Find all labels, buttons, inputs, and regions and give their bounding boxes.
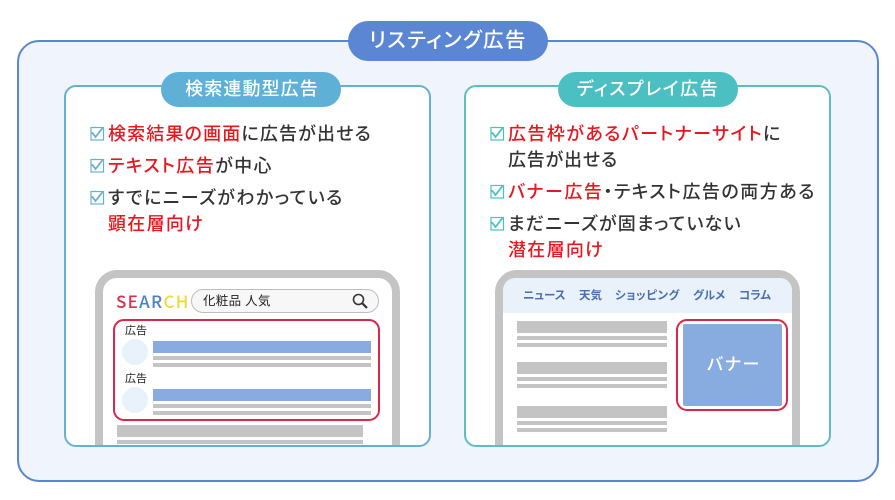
ad results highlight (113, 319, 380, 421)
panel: search-linked ads (64, 85, 431, 447)
title: listing ads (348, 21, 548, 61)
text block: search-linked ad features (90, 124, 372, 234)
heading: display ads: ディスプレイ広告 (577, 79, 719, 99)
panel: display ads (464, 85, 831, 447)
article row 2 (517, 362, 667, 388)
heading: search-linked ads (161, 72, 341, 107)
text block: display ad features (490, 124, 816, 260)
site navigation bar (503, 278, 792, 313)
ad result row 2 (122, 387, 371, 415)
banner highlight (676, 319, 788, 411)
text: bullet 3: すでにニーズがわかっている (108, 188, 344, 208)
text: bullet 2: テキスト広告が中心 (108, 156, 273, 176)
text: bullet 2: バナー広告・テキスト広告の両方ある (508, 182, 816, 202)
heading: display ads (558, 72, 738, 107)
nav label: ショッピング (615, 290, 680, 302)
text: bullet 3 highlight: 潜在層向け (508, 240, 604, 260)
label: ad 1: 広告 (125, 325, 147, 337)
text: bullet 1 continued: 広告が出せる (508, 150, 618, 170)
text: bullet 1: 広告枠があるパートナーサイトに (508, 124, 782, 144)
device mockup: website (495, 270, 800, 470)
text: bullet 3 highlight: 顕在層向け (108, 214, 204, 234)
nav label: グルメ (693, 290, 725, 302)
banner ad: バナー (706, 355, 760, 374)
nav label: ニュース (523, 290, 566, 302)
nav label: 天気 (579, 290, 602, 302)
article row 3 (517, 406, 667, 432)
article row 1 (517, 321, 667, 347)
heading: search-linked ads: 検索連動型広告 (185, 79, 319, 99)
title: listing ads: リスティング広告 (369, 29, 527, 52)
label: ad 2: 広告 (125, 373, 147, 385)
banner ad (683, 324, 782, 406)
search box (191, 289, 379, 313)
nav label: コラム (739, 290, 771, 302)
icon: checkbox (490, 184, 504, 199)
text: search query: 化粧品 人気 (203, 294, 271, 308)
icon: checkbox (90, 190, 104, 205)
icon: checkbox (490, 216, 504, 231)
icon: checkbox (90, 126, 104, 141)
device mockup: search results (95, 270, 400, 470)
icon: checkbox (90, 158, 104, 173)
ad result row 1 (122, 339, 371, 367)
logo: SEARCH: SEARCH (116, 288, 190, 313)
text: bullet 3: まだニーズが固まっていない (508, 214, 742, 234)
organic result row (117, 425, 363, 444)
icon: checkbox (490, 126, 504, 141)
text: bullet 1: 検索結果の画面に広告が出せる (108, 124, 372, 144)
icon: magnifier (352, 294, 368, 309)
